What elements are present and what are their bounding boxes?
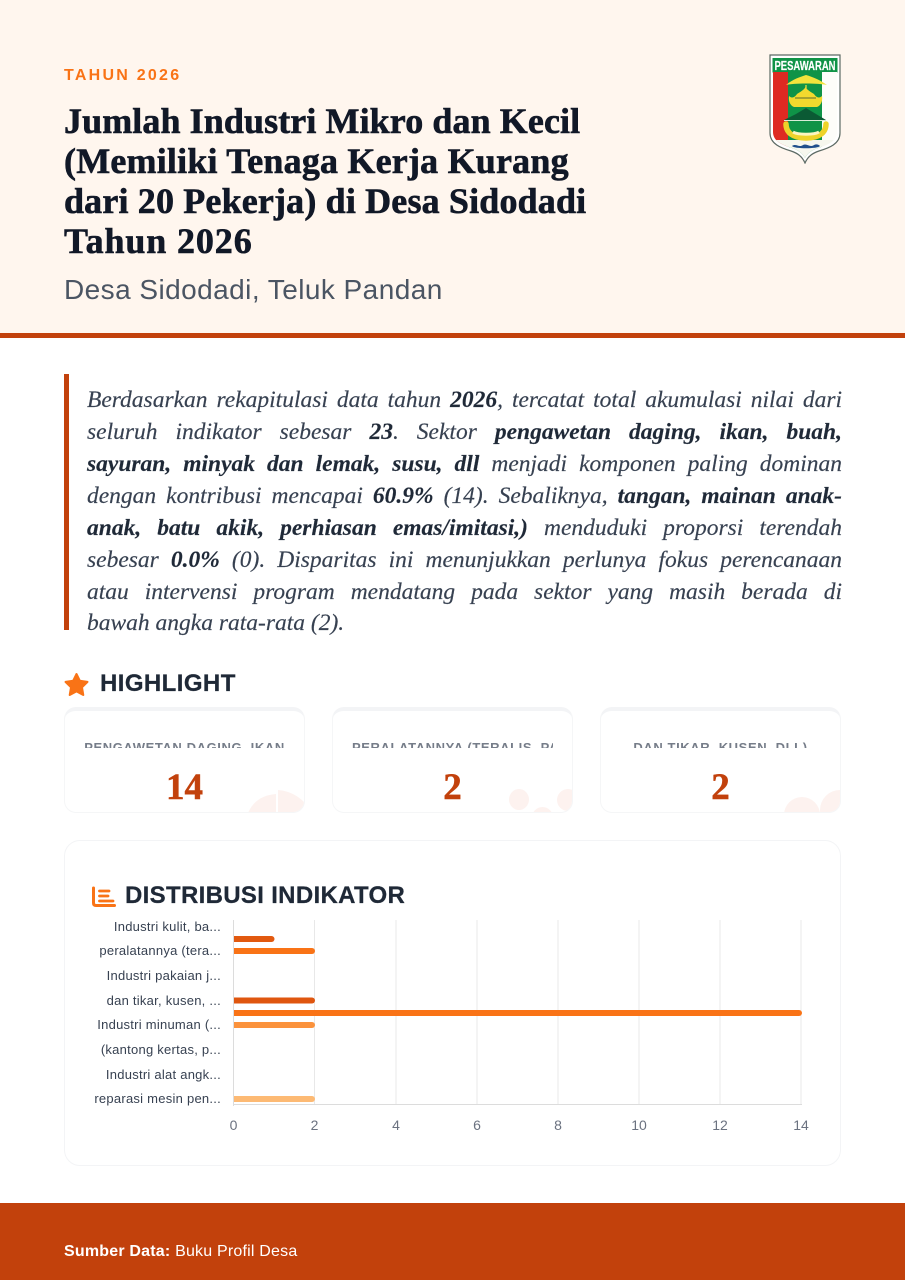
card value: 14	[166, 767, 203, 808]
card value: 2	[711, 767, 730, 808]
icon: star	[64, 673, 88, 696]
title: dari 20 Pekerja) di Desa Sidodadi	[64, 181, 586, 221]
category labels: reparasi mesin pen...	[94, 1091, 221, 1106]
icon: Pesawaran shield emblem	[769, 54, 841, 164]
paragraph text: bawah angka rata-rata (2).	[87, 610, 344, 636]
title	[64, 101, 586, 261]
paragraph text: Berdasarkan rekapitulasi data tahun 2026, tercatat total akumulasi nilai dari	[87, 387, 842, 413]
card value: 2	[443, 767, 462, 808]
value axis ticks: 14	[793, 1117, 809, 1133]
subtitle: Desa Sidodadi, Teluk Pandan	[64, 274, 443, 305]
decorative blob	[248, 790, 304, 812]
category labels: dan tikar, kusen, ...	[107, 993, 221, 1008]
bars	[234, 936, 802, 1102]
title: Tahun 2026	[64, 221, 253, 261]
value axis ticks: 12	[712, 1117, 728, 1133]
header panel	[0, 0, 905, 338]
card: peralatannya	[332, 707, 573, 813]
icon: bar chart list	[92, 886, 116, 907]
decorative blob	[784, 797, 820, 833]
value axis ticks: 10	[631, 1117, 647, 1133]
paragraph text: sebesar 0.0% (0). Disparitas ini menunjukkan perlunya fokus perencanaan	[87, 547, 842, 573]
category labels	[94, 919, 221, 1106]
value axis ticks: 4	[392, 1117, 400, 1133]
card: pengawetan daging	[64, 707, 305, 813]
paragraph text	[86, 387, 842, 636]
paragraph text: sayuran, minyak dan lemak, susu, dll menjadi komponen paling dominan	[87, 451, 842, 477]
paragraph text: seluruh indikator sebesar 23. Sektor pengawetan daging, ikan, buah,	[87, 419, 842, 445]
category labels: Industri kulit, ba...	[114, 919, 221, 934]
value axis ticks: 0	[230, 1117, 238, 1133]
year label: TAHUN 2026	[64, 67, 181, 84]
summary paragraph with accent bar	[64, 374, 842, 636]
chart panel	[64, 840, 841, 1166]
value axis ticks	[230, 1117, 809, 1133]
title: Jumlah Industri Mikro dan Kecil	[64, 101, 580, 141]
value axis ticks: 8	[554, 1117, 562, 1133]
header rule	[0, 333, 905, 338]
chart heading	[92, 882, 405, 909]
highlight heading	[64, 670, 236, 697]
heading text: HIGHLIGHT	[100, 670, 236, 697]
accent bar	[64, 374, 69, 630]
footer	[0, 1203, 905, 1280]
category labels: Industri alat angk...	[106, 1067, 221, 1082]
horizontal bar chart	[94, 919, 809, 1133]
paragraph text: anak, batu akik, perhiasan emas/imitasi,) menduduki proporsi terendah	[87, 515, 842, 541]
decorative blob	[509, 789, 529, 810]
paragraph text: dengan kontribusi mencapai 60.9% (14). Sebaliknya, tangan, mainan anak-	[87, 483, 842, 509]
card: dan tikar	[600, 707, 841, 813]
source note: Sumber Data: Buku Profil Desa	[64, 1243, 297, 1260]
category labels: (kantong kertas, p...	[101, 1042, 221, 1057]
paragraph text: atau intervensi program mendatang pada sektor yang masih berada di	[87, 579, 842, 605]
value axis ticks: 6	[473, 1117, 481, 1133]
heading text: DISTRIBUSI INDIKATOR	[125, 882, 405, 909]
category labels: peralatannya (tera...	[99, 943, 221, 958]
category labels: Industri minuman (...	[97, 1017, 221, 1032]
category labels: Industri pakaian j...	[107, 968, 221, 983]
value axis ticks: 2	[311, 1117, 319, 1133]
title: (Memiliki Tenaga Kerja Kurang	[64, 141, 569, 181]
